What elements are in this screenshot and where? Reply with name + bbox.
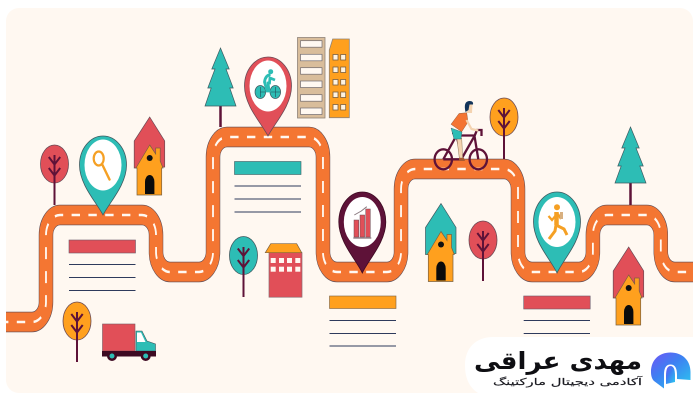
tree: orange bottom — [63, 302, 91, 362]
tree: orange top — [490, 98, 518, 159]
tree: red left — [40, 145, 68, 205]
text block placeholder: step 1 — [69, 240, 136, 290]
house: red roof left — [134, 117, 165, 195]
logo icon — [651, 352, 690, 388]
logo wordmark: مهدی عراقی — [474, 347, 642, 375]
map pin: runner — [534, 192, 580, 273]
house: teal roof center — [426, 204, 456, 282]
winding road — [0, 137, 700, 322]
rider — [451, 101, 478, 161]
tree: teal middle — [230, 236, 258, 297]
map pin: magnifier — [80, 136, 126, 215]
icon: runner — [548, 204, 567, 239]
text block placeholder: step 4 — [524, 296, 590, 334]
map pin: growth chart — [339, 192, 386, 273]
logo badge — [465, 337, 700, 400]
red building — [265, 244, 302, 297]
tan building — [298, 38, 325, 118]
pine tree: right — [615, 127, 646, 205]
pine tree: left — [205, 48, 236, 127]
cyclist on road — [435, 101, 487, 169]
tree: red center — [469, 221, 497, 281]
house: red roof right — [613, 247, 644, 325]
orange building — [329, 39, 349, 118]
text block placeholder: step 3 — [330, 296, 396, 346]
bicycle — [435, 130, 487, 169]
logo tagline: آکادمی دیجیتال مارکتینگ — [493, 375, 643, 388]
text block placeholder: step 2 — [234, 162, 301, 212]
icon: magnifying glass — [94, 152, 110, 180]
icon: cyclist — [255, 69, 281, 98]
map pin: cycling — [244, 57, 292, 136]
icon: bar chart — [353, 207, 371, 238]
delivery truck — [102, 324, 156, 361]
